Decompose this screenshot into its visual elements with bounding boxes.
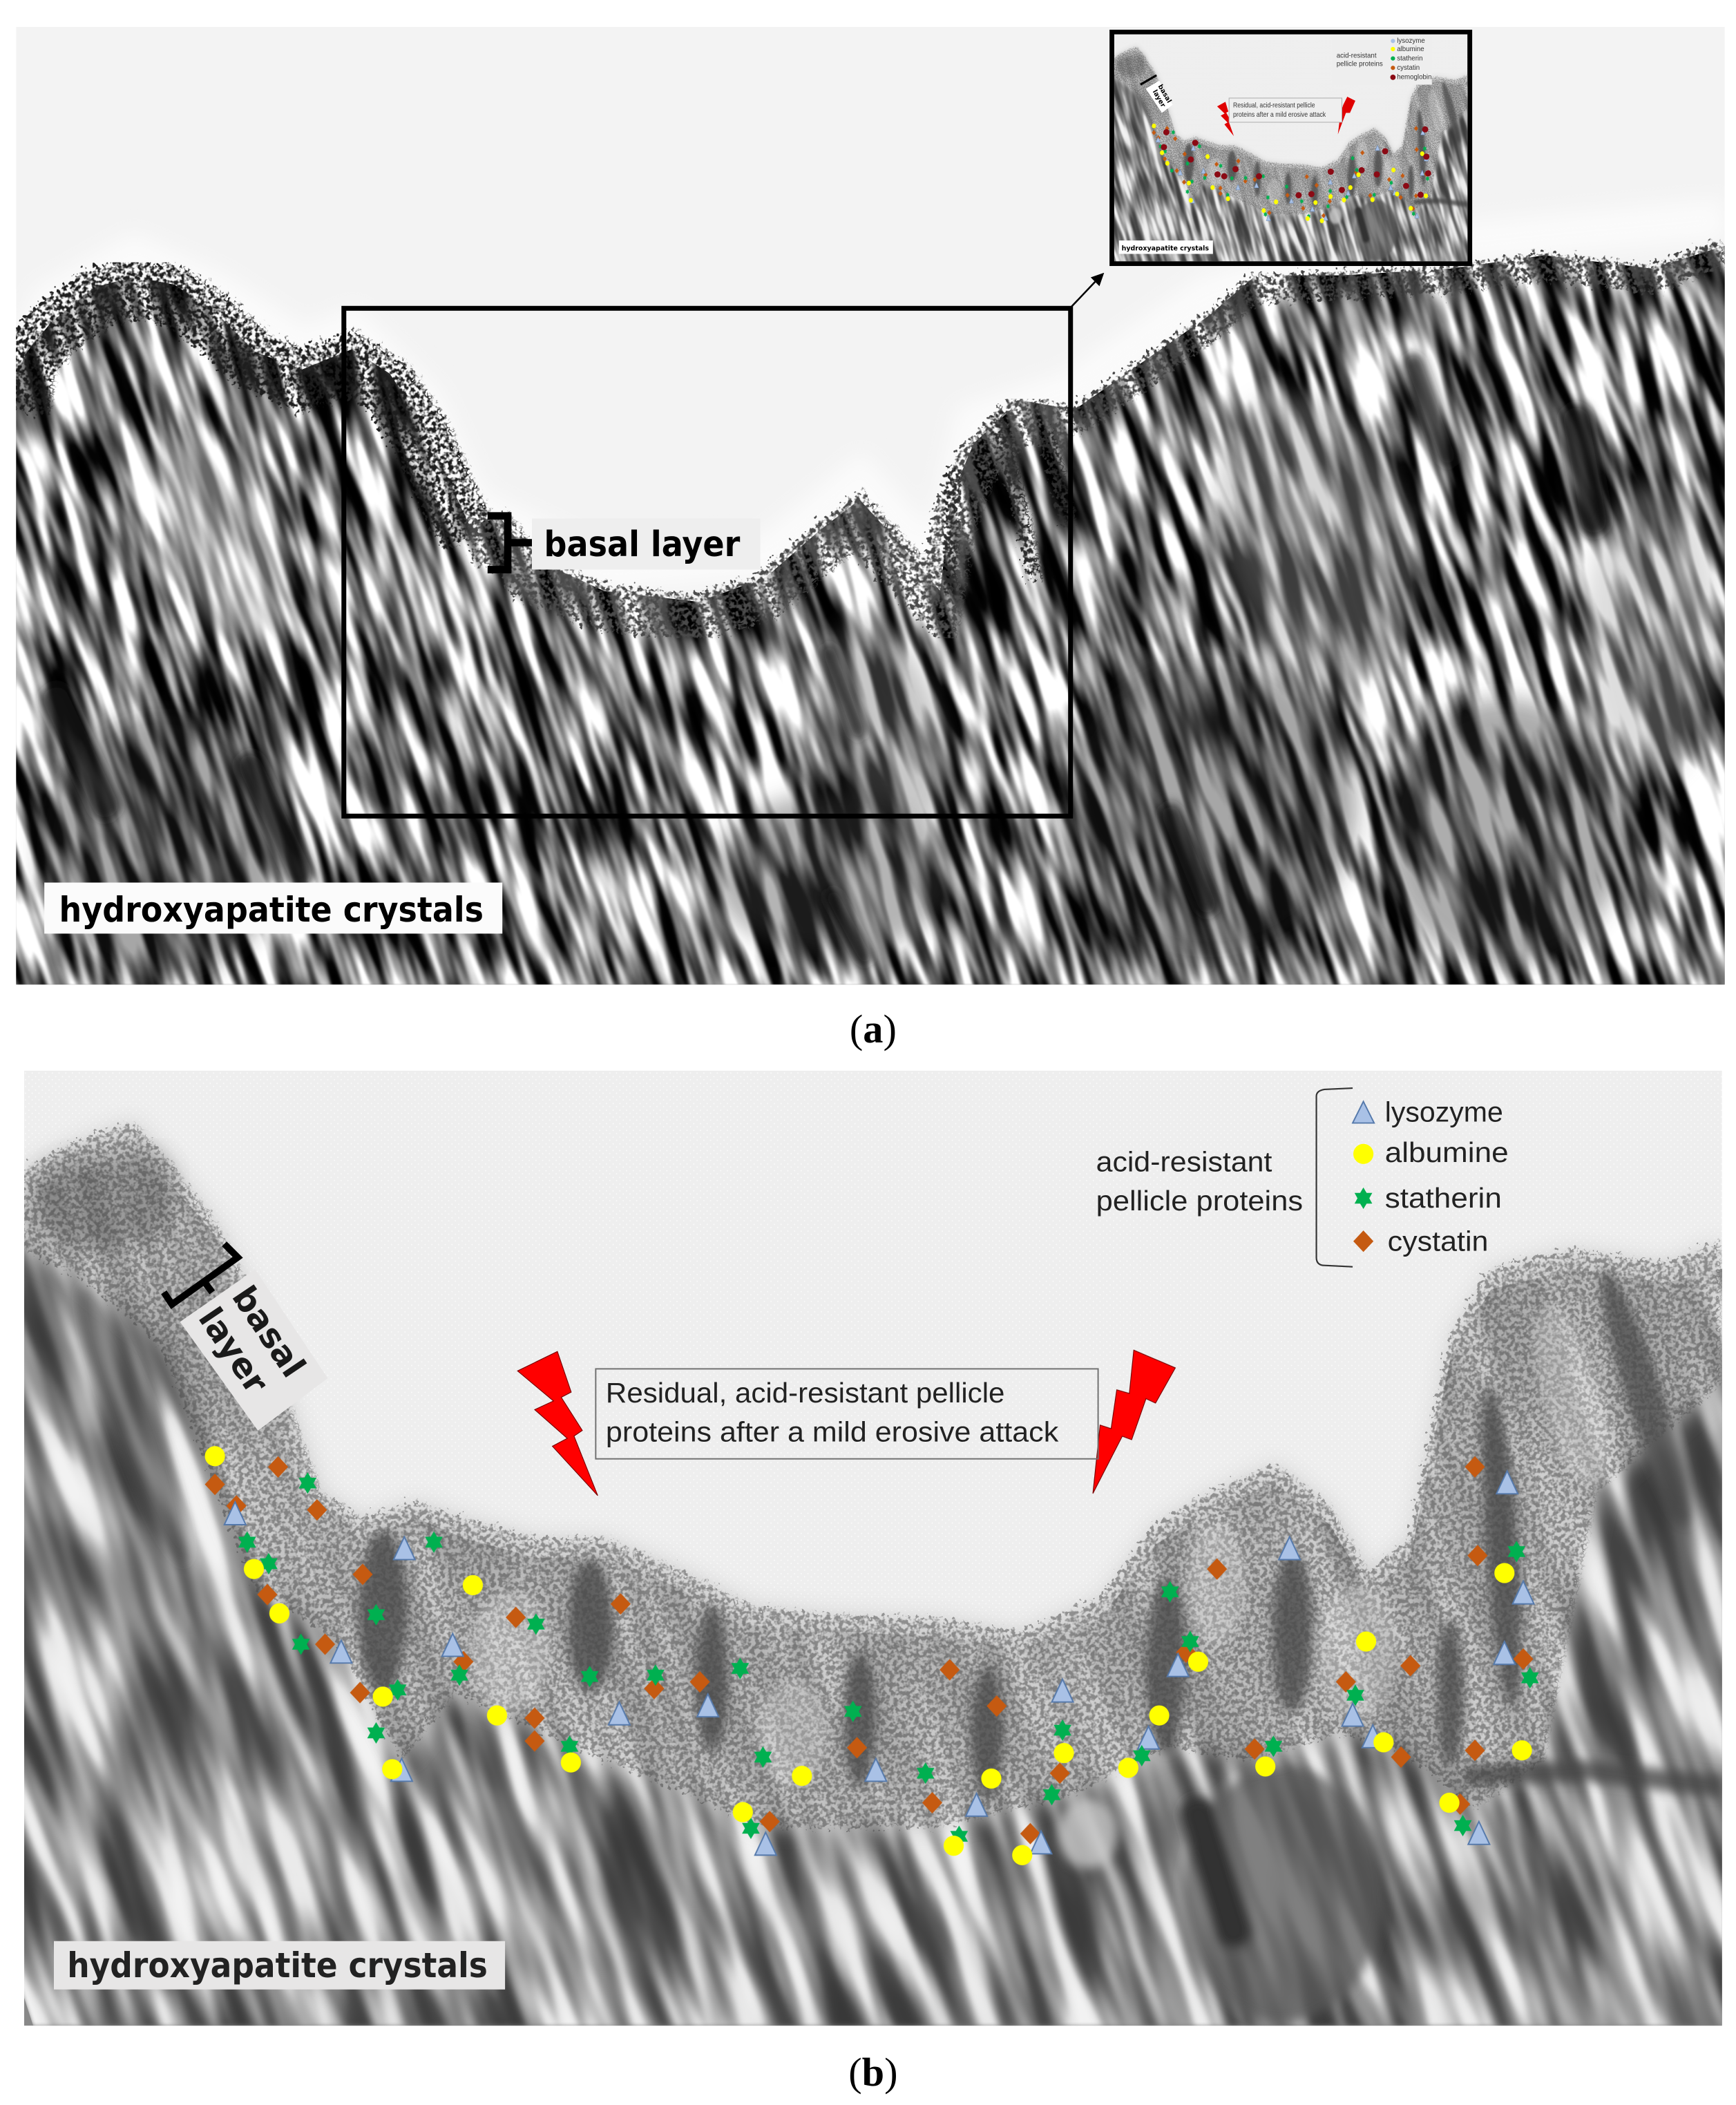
inset legend: acid-resistant: [1337, 53, 1377, 60]
proteins: statherin markers: [238, 1472, 1539, 1847]
proteins: cystatin markers: [205, 1456, 1534, 1845]
caption a: (a): [850, 1007, 897, 1051]
arrow to inset: [1071, 273, 1104, 307]
inset legend: hemoglobin: [1397, 74, 1431, 82]
fuzzy pellicle band, soft grey: [24, 1122, 1722, 1827]
hydroxyapatite label, panel a: hydroxyapatite crystals: [59, 890, 484, 930]
legend title: [1096, 1146, 1303, 1217]
background of panel a: [17, 27, 1724, 602]
basal layer bracket, panel b: [164, 1244, 238, 1304]
legend item lysozyme: lysozyme: [1385, 1096, 1503, 1128]
proteins: lysozyme markers: [225, 1471, 1534, 1855]
large-scale tonal variation: [40, 368, 1719, 980]
basal layer label: basal layer: [544, 524, 740, 564]
inset basal layer label: basal: [1156, 83, 1173, 104]
panel a: micrograph of hydroxyapatite crystals with basal layer: [0, 27, 1736, 984]
dark crystal roots in the fuzzy band: [359, 1264, 1722, 1800]
basal layer rotated label: [180, 1270, 327, 1431]
legend: proteins: [1353, 1096, 1509, 1257]
legend item statherin: statherin: [1385, 1182, 1502, 1214]
selection rectangle: [344, 308, 1071, 816]
inset legend: statherin: [1397, 55, 1423, 63]
fuzzy pellicle rim, left: [21, 287, 470, 537]
crystal texture: [0, 1155, 1736, 2026]
inset hydroxyapatite label: [1119, 240, 1213, 254]
inset bolt left: [1217, 102, 1234, 136]
panel b: magnified view with residual proteins: [0, 1071, 1736, 2026]
pellicle fingers: [950, 417, 1071, 591]
legend item cystatin: cystatin: [1388, 1225, 1488, 1257]
basal layer rotated label: layer: [191, 1301, 276, 1401]
hydroxyapatite label, panel b: hydroxyapatite crystals: [67, 1945, 488, 1985]
inset hemoglobin markers: [1161, 126, 1431, 198]
basal layer rotated label: basal: [224, 1279, 313, 1384]
inset: thumbnail of panel b with hemoglobin: [1058, 30, 1524, 266]
inset basal layer label: layer: [1151, 88, 1167, 109]
inset legend: cystatin: [1397, 64, 1420, 72]
legend title: acid-resistant: [1096, 1146, 1272, 1178]
inset basal layer label: [1141, 75, 1173, 113]
fuzzy pellicle rim, right: [1075, 253, 1725, 423]
inset callout: Residual, acid-resistant pellicle: [1233, 102, 1315, 110]
inset bolt right: [1338, 97, 1355, 134]
inset legend: albumine: [1397, 46, 1424, 53]
callout: residual proteins: proteins after a mild erosive attack: [606, 1416, 1059, 1447]
lighter mottling in the band: [470, 1299, 1625, 1787]
inset hydroxyapatite label: hydroxyapatite crystals: [1122, 245, 1209, 253]
inset callout: [1229, 98, 1342, 122]
inset legend: [1333, 37, 1432, 85]
callout: residual proteins: [595, 1369, 1098, 1459]
lightning bolt right: [1093, 1350, 1175, 1494]
legend item albumine: albumine: [1385, 1136, 1509, 1168]
background of panel b: [24, 1071, 1722, 2026]
legend bracket: [1317, 1088, 1353, 1267]
inset legend: pellicle proteins: [1337, 60, 1383, 68]
fuzzy pellicle band, dark speckle: [24, 1122, 1722, 1827]
lightning bolt left: [517, 1351, 598, 1496]
inset legend: lysozyme: [1397, 37, 1425, 45]
inset callout: proteins after a mild erosive attack: [1233, 111, 1326, 119]
basal layer bracket: [488, 516, 532, 569]
caption b: (b): [848, 2050, 898, 2095]
legend title: pellicle proteins: [1096, 1185, 1303, 1217]
proteins: albumine markers: [205, 1446, 1532, 1865]
pale halo above the tissue edge: [16, 219, 1725, 571]
fuzzy pellicle rim, middle: [470, 419, 1075, 618]
callout: residual proteins: Residual, acid-resistant pellicle: [606, 1377, 1004, 1409]
crystal texture: [0, 229, 1736, 984]
dark mottling at top left of the band: [27, 1149, 175, 1249]
